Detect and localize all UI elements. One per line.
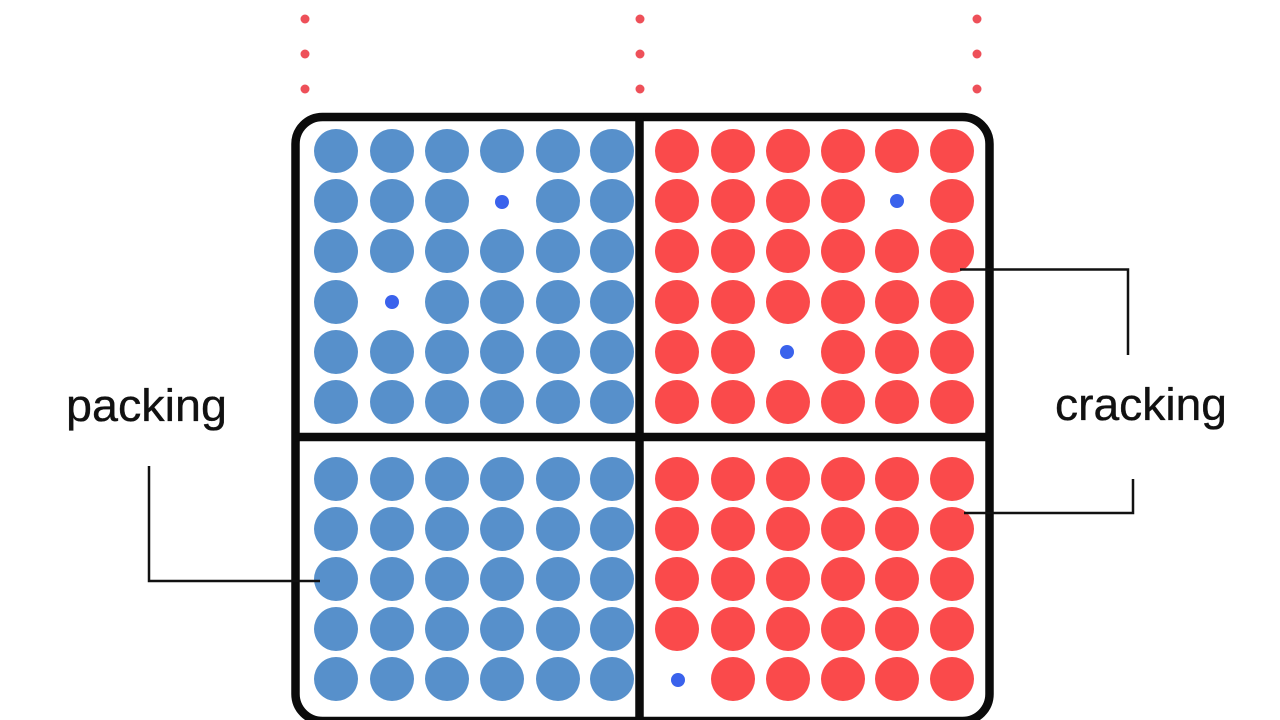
grid frame with four districts: [295, 117, 990, 720]
packing label: packing: [66, 380, 227, 431]
blue voter dots, upper left district: [314, 129, 634, 424]
blue voter dots, lower left district: [314, 457, 634, 701]
red voter dots, lower right district: [655, 457, 974, 701]
packing leader line: [149, 466, 320, 581]
dotted red lines above the grid: [300, 14, 982, 94]
cracking label: cracking: [1055, 379, 1227, 430]
red voter dots, upper right district: [655, 129, 974, 424]
cracking leader line, lower: [964, 479, 1133, 513]
small blue dots: [385, 194, 904, 687]
cracking leader line, upper: [960, 270, 1128, 355]
